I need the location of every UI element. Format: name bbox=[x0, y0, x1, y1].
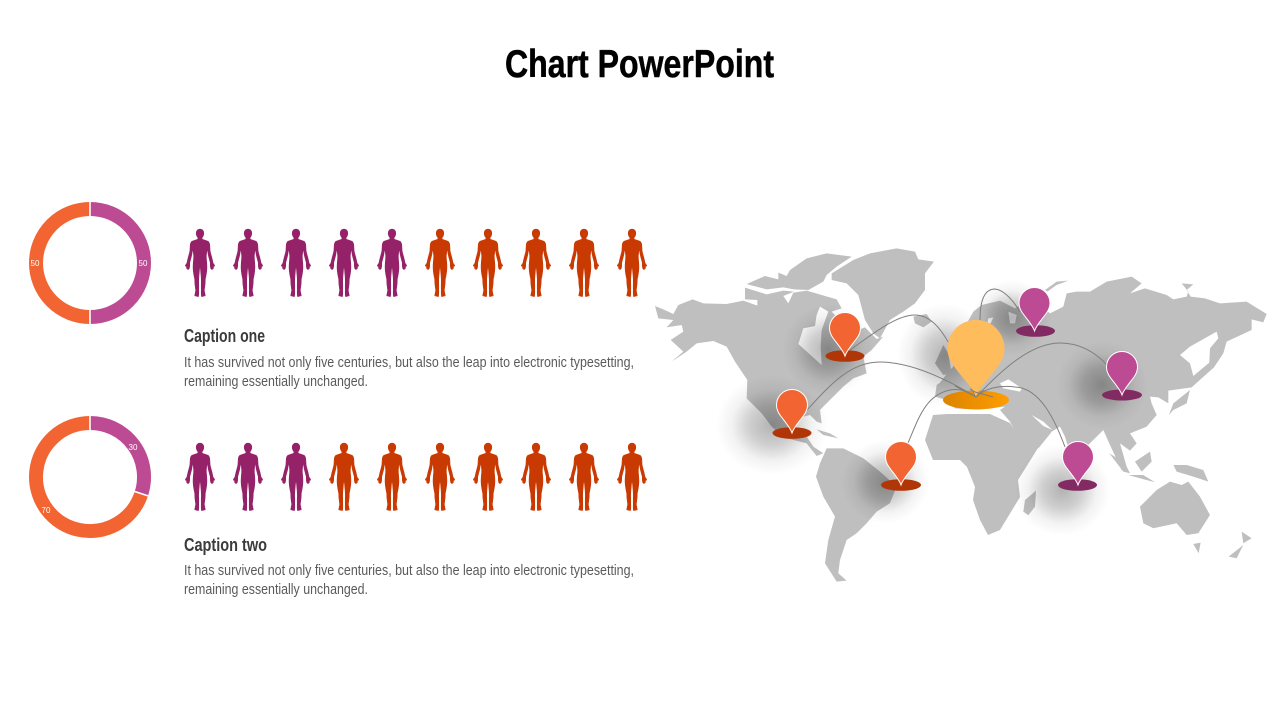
caption two bbox=[184, 535, 634, 598]
pin: Europe hub bbox=[948, 320, 1004, 397]
world map bbox=[655, 248, 1267, 582]
donut chart: 30/70: 70 bbox=[42, 506, 51, 515]
connecting arcs bbox=[807, 289, 1107, 447]
arc ends over hub tip bbox=[955, 386, 993, 397]
hub ellipse bbox=[943, 390, 1009, 410]
pin: Canada bbox=[826, 312, 864, 362]
caption two: It has survived not only five centuries, but also the leap into electronic typesetting, bbox=[184, 562, 634, 579]
pin: China bbox=[1102, 352, 1142, 400]
title: Chart PowerPoint bbox=[505, 43, 774, 86]
pictogram row one: 5 of 10 bbox=[185, 229, 647, 297]
donut chart: 50/50 bbox=[31, 200, 148, 326]
pictogram row two: 3 of 10 bbox=[185, 443, 647, 511]
pin: Mexico bbox=[772, 390, 812, 439]
caption one bbox=[184, 326, 634, 390]
caption two: Caption two bbox=[184, 535, 267, 555]
caption two: remaining essentially unchanged. bbox=[184, 581, 368, 598]
caption one: remaining essentially unchanged. bbox=[184, 373, 368, 390]
donut chart: 30/70 bbox=[36, 414, 153, 531]
pin: India bbox=[1058, 442, 1097, 491]
caption one: It has survived not only five centuries, but also the leap into electronic typesetting, bbox=[184, 354, 634, 371]
donut chart: 50/50: 50 bbox=[139, 259, 148, 268]
pin shadows bbox=[716, 280, 1148, 536]
donut chart: 30/70: 30 bbox=[129, 443, 138, 452]
pin: Brazil bbox=[881, 442, 921, 491]
caption one: Caption one bbox=[184, 326, 265, 346]
pin: Russia bbox=[1016, 288, 1055, 337]
donut chart: 50/50: 50 bbox=[31, 259, 40, 268]
